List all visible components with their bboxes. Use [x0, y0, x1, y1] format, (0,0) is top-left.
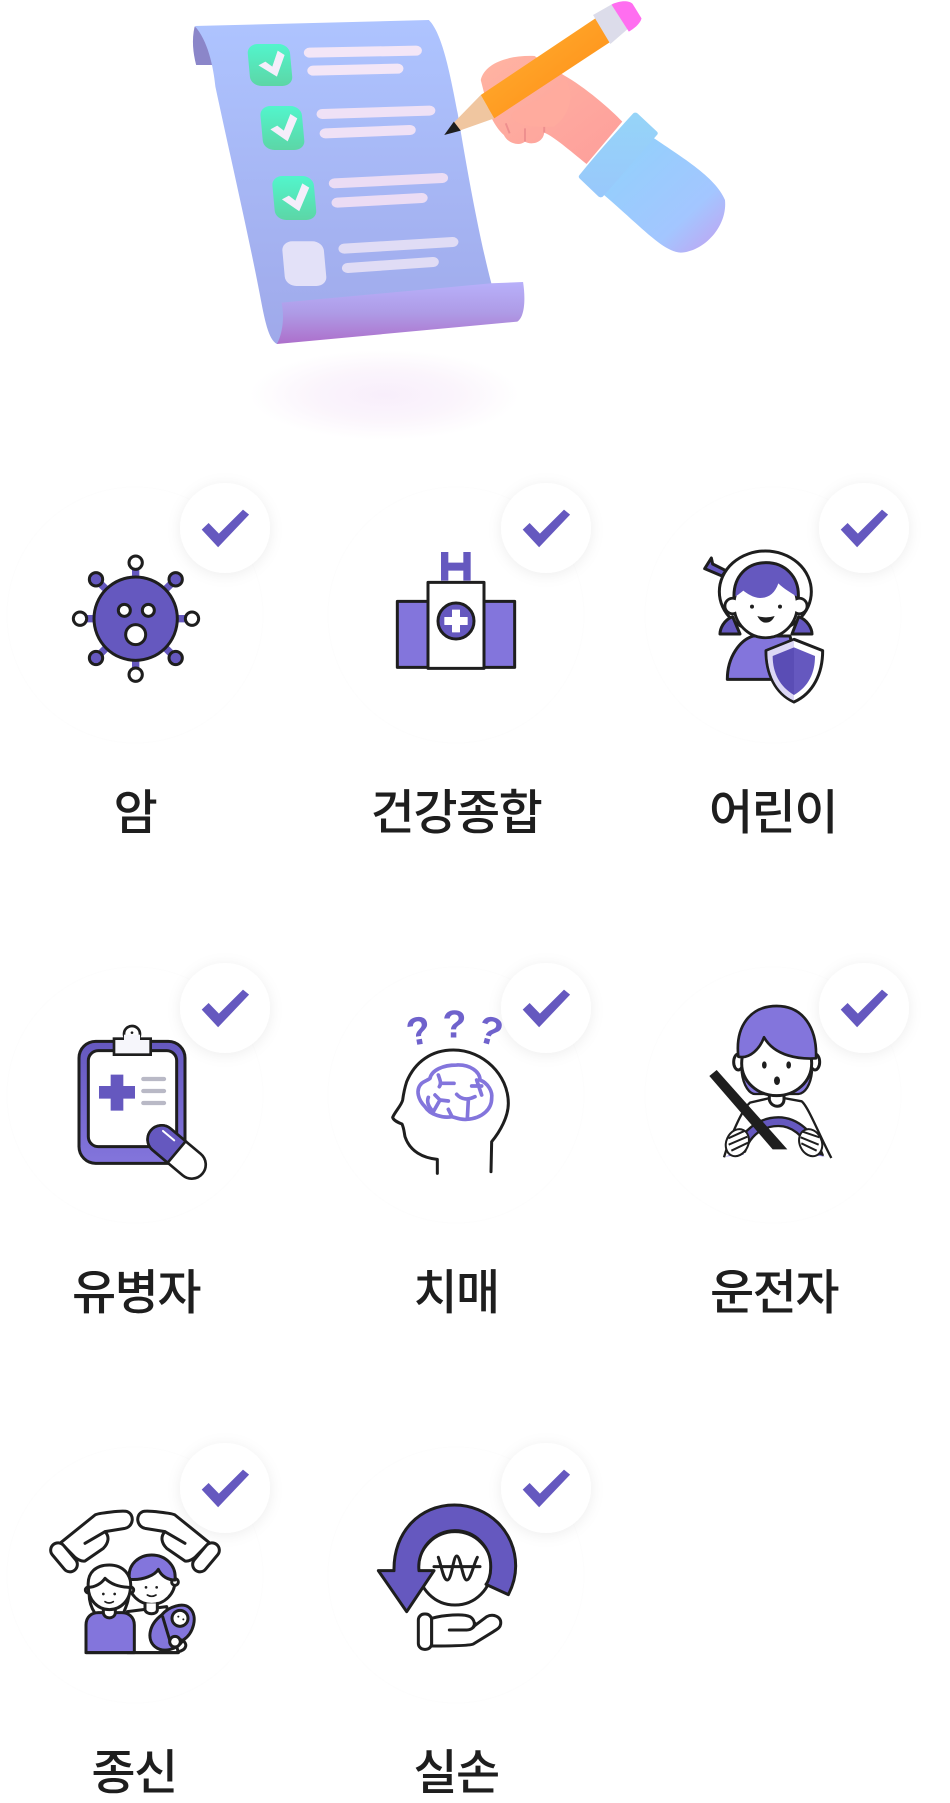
card: life insurance: [7, 1443, 270, 1800]
icon: hands protecting family: [48, 1511, 222, 1653]
icon: virus: [73, 556, 199, 681]
label: 실손: [413, 1747, 499, 1800]
icon: head with brain: ?: [473, 1007, 508, 1056]
card: children: [645, 483, 909, 840]
cuff: [582, 115, 655, 195]
pencil: [444, 1, 642, 135]
label: 어린이: [709, 787, 837, 840]
check badge: [501, 963, 591, 1053]
scroll bottom roll: [277, 282, 524, 344]
check badge: [180, 483, 270, 573]
sleeve: [596, 132, 725, 253]
icon: driver with seat belt: [709, 1006, 831, 1160]
floating shadow: [250, 350, 519, 440]
card: indemnity: [328, 1443, 591, 1800]
icon: child with shield: [705, 551, 823, 702]
hand: [481, 56, 622, 164]
card: dementia: [328, 963, 591, 1320]
illustration: checklist scroll and hand with pencil: [193, 1, 725, 440]
scroll sheet: [195, 20, 496, 344]
icon: money back arrow and hand: [378, 1505, 516, 1649]
icon: clipboard and pill: [79, 1026, 211, 1184]
label: 건강종합: [371, 787, 542, 840]
finger creases: [506, 123, 544, 142]
check badge: [501, 483, 591, 573]
label: 종신: [91, 1747, 177, 1800]
check badge: [819, 963, 909, 1053]
card: driver: [645, 963, 909, 1320]
check badge: [180, 1443, 270, 1533]
label: 운전자: [710, 1267, 838, 1320]
icon: head with brain: [393, 1003, 508, 1173]
icon: head with brain: ?: [442, 1003, 466, 1047]
icon: hospital: [397, 552, 515, 668]
checklist rows: [247, 44, 453, 286]
scroll curl top: [193, 27, 213, 65]
thumb: [512, 77, 570, 127]
label: 유병자: [72, 1267, 200, 1320]
card: cancer: [7, 483, 270, 840]
label: 치매: [413, 1267, 499, 1320]
check badge: [180, 963, 270, 1053]
check badge: [819, 483, 909, 573]
card: health check: [328, 483, 591, 840]
card: pre-existing conditions: [7, 963, 270, 1320]
check badge: [501, 1443, 591, 1533]
label: 암: [114, 787, 157, 840]
icon: head with brain: ?: [403, 1008, 434, 1055]
